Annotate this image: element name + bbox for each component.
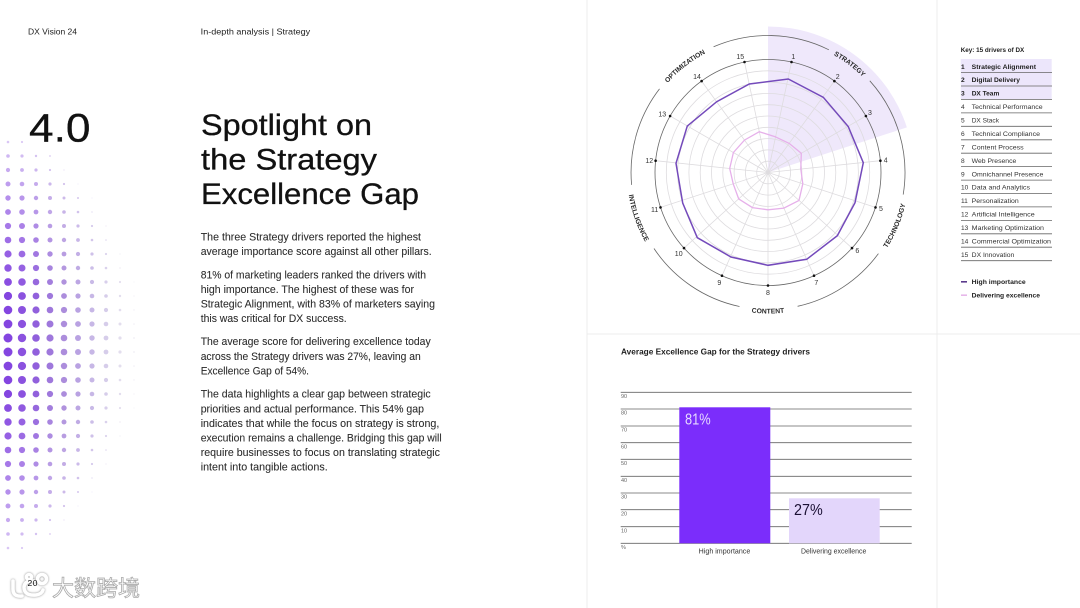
body text: Strategic Alignment, with 83% of marketers saying xyxy=(201,298,435,310)
key list: Content Process xyxy=(972,144,1024,151)
body text: indicates that while the focus on strategy is strong, xyxy=(201,418,439,430)
bar: delivering excellence xyxy=(789,498,880,543)
driver numbers: 10 xyxy=(675,251,683,258)
delivering excellence line xyxy=(730,132,803,210)
body text: priorities and actual performance. This 54% gap xyxy=(201,403,424,415)
bar label: delivering excellence: Delivering excellence xyxy=(801,549,866,556)
pillar labels: OPTIMIZATION xyxy=(665,50,705,82)
key list: 4 xyxy=(961,104,965,111)
decorative halftone dot gradient xyxy=(4,141,135,549)
driver numbers: 13 xyxy=(658,112,666,118)
key list: 1 xyxy=(961,64,965,71)
driver numbers: 11 xyxy=(651,207,658,214)
axis labels: 20 xyxy=(621,511,627,517)
axis labels: 90 xyxy=(621,394,627,400)
bar: high importance: 81% xyxy=(685,411,711,428)
driver numbers: 3 xyxy=(868,110,872,117)
key list: Technical Compliance xyxy=(972,131,1040,138)
axis labels: 30 xyxy=(621,495,627,501)
key list: Strategic Alignment xyxy=(972,64,1037,71)
key list: Technical Performance xyxy=(972,104,1043,111)
driver numbers: 12 xyxy=(645,158,653,165)
axis labels: 40 xyxy=(621,478,627,484)
driver numbers: 4 xyxy=(884,158,888,164)
driver numbers: 9 xyxy=(717,280,721,287)
driver numbers: 15 xyxy=(736,54,744,61)
key list: 15 xyxy=(961,252,969,259)
axis labels xyxy=(621,394,627,551)
key list: DX Innovation xyxy=(972,252,1015,259)
key list: Digital Delivery xyxy=(972,77,1020,84)
key panel xyxy=(961,47,1052,299)
body text: The data highlights a clear gap between strategic xyxy=(201,389,431,401)
strategy pillar highlight wedge xyxy=(768,26,907,172)
driver numbers xyxy=(645,54,888,297)
title: Excellence Gap xyxy=(201,178,419,211)
body text: this was critical for DX success. xyxy=(201,313,347,325)
body text: The average score for delivering excellence today xyxy=(201,336,431,348)
key list: 7 xyxy=(961,144,965,151)
key list: Data and Analytics xyxy=(972,185,1031,192)
title: Spotlight on xyxy=(201,109,372,142)
key list: Omnichannel Presence xyxy=(972,171,1044,178)
key list: DX Team xyxy=(972,91,999,98)
key list: 3 xyxy=(961,91,965,98)
page number: 20 xyxy=(28,578,38,588)
key list: Artificial Intelligence xyxy=(972,212,1035,219)
key list: Commercial Optimization xyxy=(972,238,1051,245)
bar: delivering excellence: 27% xyxy=(794,502,823,519)
driver numbers: 14 xyxy=(693,74,701,81)
pillar labels: INTELLIGENCE xyxy=(628,194,649,242)
watermark text: 大数跨境 xyxy=(52,576,140,601)
pillar labels: STRATEGY xyxy=(834,52,866,76)
body text: execution remains a challenge. Bridging this gap will xyxy=(201,433,442,445)
radar chart xyxy=(628,26,907,314)
body text: across the Strategy drivers was 27%, leaving an xyxy=(201,351,421,363)
body text: require businesses to focus on translating strategic xyxy=(201,447,441,459)
axis labels: % xyxy=(621,545,626,551)
key highlight band xyxy=(961,59,1052,99)
axis labels: 80 xyxy=(621,411,627,417)
key list: Personalization xyxy=(972,198,1019,205)
pillar labels: TECHNOLOGY xyxy=(883,203,905,247)
body text: intent into tangible actions. xyxy=(201,462,328,474)
key list: Web Presence xyxy=(972,158,1017,165)
header: publication name: DX Vision 24 xyxy=(28,26,77,36)
legend: delivering excellence: Delivering excellence xyxy=(972,292,1040,299)
key list: 6 xyxy=(961,131,965,138)
key list: 10 xyxy=(961,185,969,192)
body text: The three Strategy drivers reported the highest xyxy=(201,232,421,244)
axis labels: 60 xyxy=(621,444,627,450)
pillar labels xyxy=(628,50,905,314)
title xyxy=(201,109,419,211)
outer pillar arcs xyxy=(631,36,905,306)
driver numbers: 6 xyxy=(855,248,859,255)
key list: 5 xyxy=(961,118,965,124)
legend: high importance: High importance xyxy=(972,279,1026,286)
body text xyxy=(201,232,442,474)
axis labels: 50 xyxy=(621,461,627,467)
key list: 9 xyxy=(961,171,965,178)
axis labels: 10 xyxy=(621,528,627,534)
body text: 81% of marketing leaders ranked the drivers with xyxy=(201,270,426,282)
key list: 8 xyxy=(961,158,965,165)
key list: 2 xyxy=(961,77,965,84)
key list: DX Stack xyxy=(972,118,1000,124)
axis labels: 70 xyxy=(621,428,627,434)
pillar labels: CONTENT xyxy=(752,308,784,314)
key title: Key: 15 drivers of DX xyxy=(961,47,1025,54)
bar chart heading: Average Excellence Gap for the Strategy drivers xyxy=(621,347,811,356)
watermark logo xyxy=(13,574,46,596)
title: the Strategy xyxy=(201,143,377,176)
body text: high importance. The highest of these was for xyxy=(201,284,414,296)
bar: high importance xyxy=(679,407,770,543)
high importance line xyxy=(676,79,863,265)
key list: Marketing Optimization xyxy=(972,225,1044,232)
driver numbers: 2 xyxy=(836,74,840,81)
key list: 11 xyxy=(961,198,968,205)
bar chart xyxy=(621,392,912,556)
section number: 4.0 xyxy=(29,107,90,151)
body text: Excellence Gap of 54%. xyxy=(201,366,309,378)
key list: 12 xyxy=(961,212,969,219)
header: section name: In-depth analysis | Strategy xyxy=(201,26,311,36)
driver markers xyxy=(654,61,882,287)
driver numbers: 1 xyxy=(791,54,795,61)
key list: 14 xyxy=(961,238,969,245)
key list xyxy=(961,64,1051,259)
body text: average importance score against all other pillars. xyxy=(201,246,432,258)
driver numbers: 5 xyxy=(879,206,883,213)
driver numbers: 7 xyxy=(814,280,818,287)
driver numbers: 8 xyxy=(766,290,770,297)
bar label: high importance: High importance xyxy=(699,549,750,556)
key list: 13 xyxy=(961,225,969,232)
